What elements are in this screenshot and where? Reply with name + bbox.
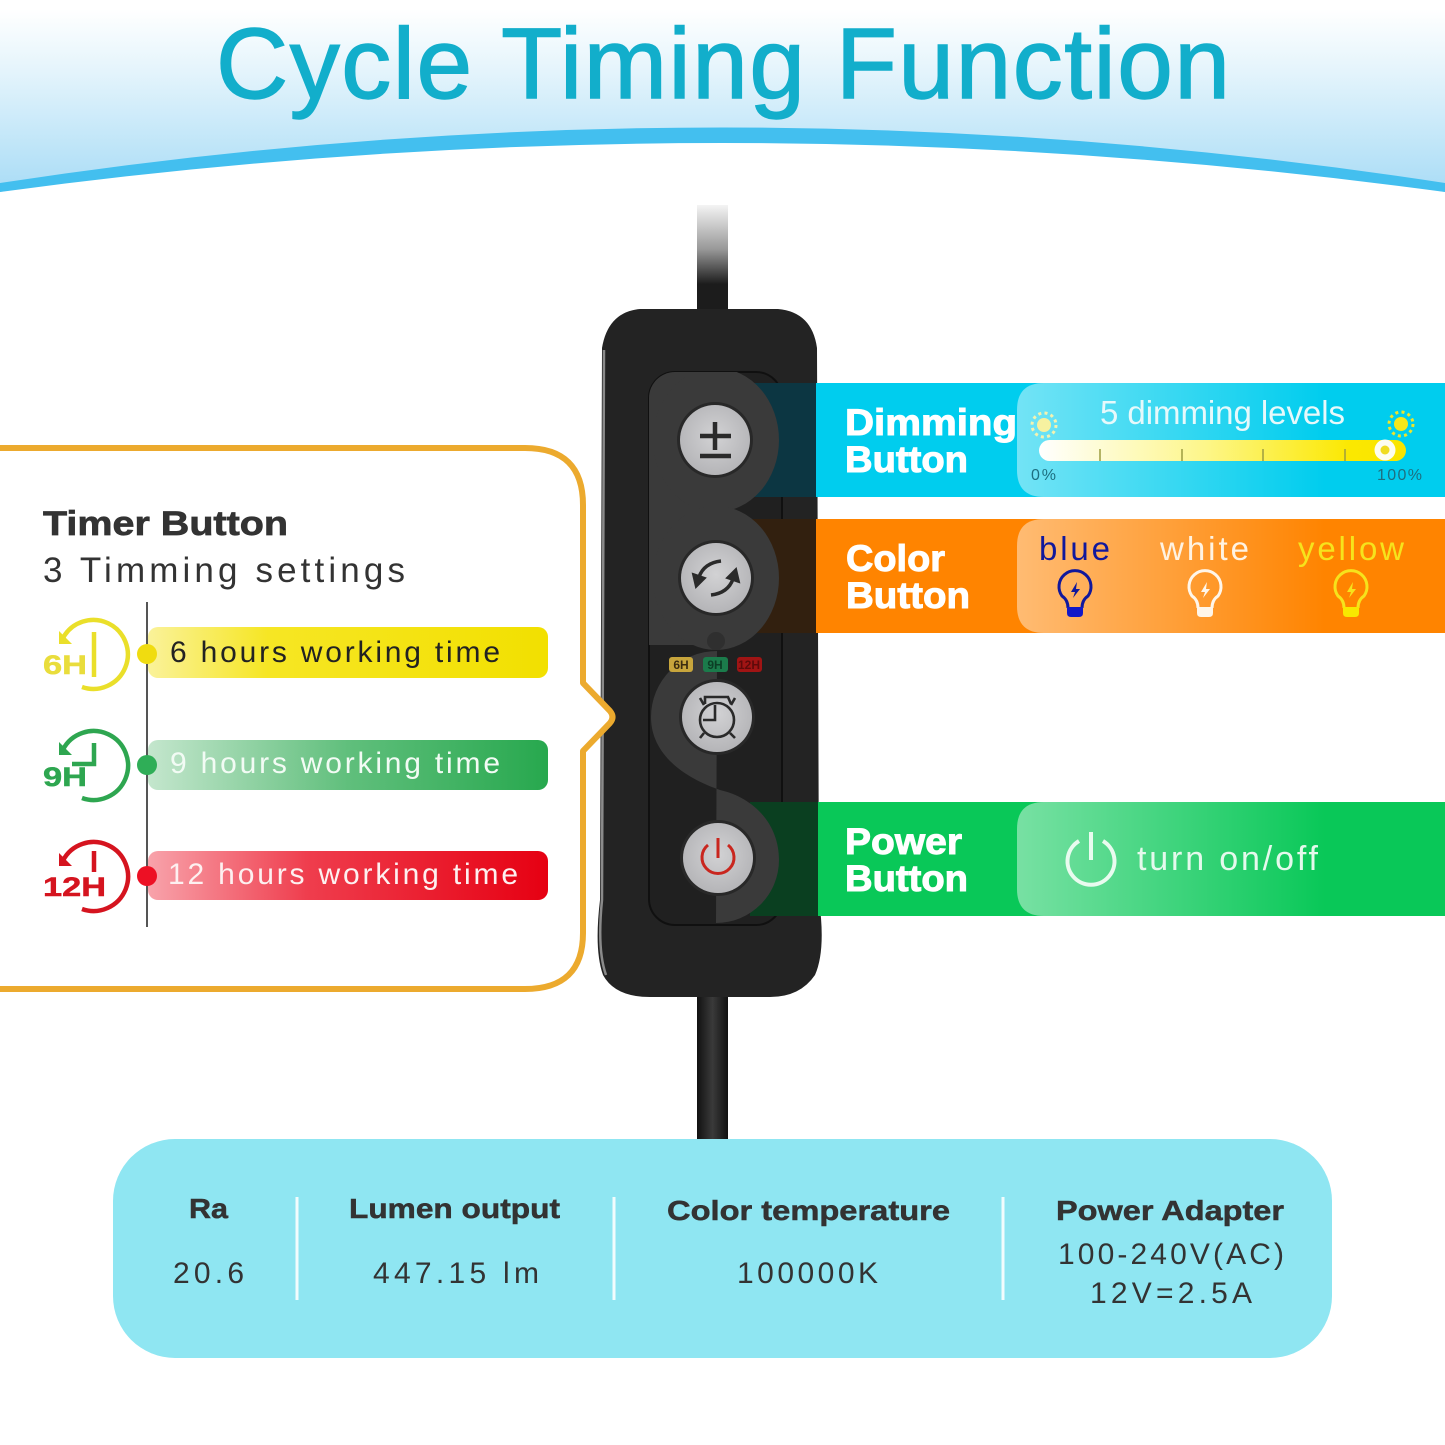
- dimming button: [677, 402, 753, 478]
- spec: Ra: [173, 1193, 244, 1290]
- slider scale labels: 0%: [1031, 467, 1056, 484]
- slider scale labels: [1031, 467, 1422, 484]
- remote control body: [598, 309, 822, 997]
- row: 9 hours: [43, 731, 548, 800]
- row: 6 hours: [43, 620, 548, 689]
- timer subheading: 3 Timming settings: [43, 551, 405, 590]
- dimming caption: 5 dimming levels: [1100, 394, 1345, 431]
- timer callout panel: [0, 448, 612, 989]
- header background: [0, 0, 1445, 192]
- spec: color temperature: 100000K: [737, 1257, 878, 1290]
- power label: Button: [845, 858, 968, 899]
- dividers: [297, 1197, 1003, 1300]
- power button: [680, 820, 756, 896]
- spec: lumen output: Lumen output: [349, 1193, 560, 1224]
- dimming glass panel: [1017, 383, 1445, 497]
- row: 9 hours: 9H: [43, 762, 87, 792]
- power label: Power: [845, 821, 962, 862]
- bright sun icon: [1389, 412, 1413, 436]
- dimming band: [816, 383, 1445, 497]
- dimming label: [845, 402, 1017, 480]
- spec: lumen output: [349, 1193, 560, 1290]
- color band: [816, 519, 1445, 633]
- row: 12 hours: 12 hours working time: [168, 858, 518, 891]
- white option: white: [1159, 530, 1249, 567]
- spec: power adapter: 12V=2.5A: [1090, 1277, 1252, 1310]
- LED labels: 6H: [673, 658, 689, 672]
- row: 6 hours: 6 hours working time: [170, 636, 500, 669]
- timeline line: [146, 602, 148, 927]
- color button: [678, 540, 754, 616]
- LED labels: 12H: [738, 658, 760, 672]
- power glass panel: [1017, 802, 1445, 916]
- LED labels: [669, 657, 762, 672]
- color label: [846, 538, 970, 616]
- power label: [845, 821, 968, 899]
- inner panel: [649, 372, 782, 925]
- spec: power adapter: 100-240V(AC): [1058, 1238, 1284, 1271]
- timer heading: Timer Button: [43, 505, 288, 543]
- row: 12 hours: [43, 842, 548, 911]
- power band: [818, 802, 1445, 916]
- spec: Ra: 20.6: [173, 1257, 244, 1290]
- row: 6 hours: 6H: [43, 650, 87, 680]
- spec: Ra: Ra: [189, 1193, 228, 1224]
- spec: lumen output: 447.15 lm: [373, 1257, 539, 1290]
- row: 12 hours: 12H: [43, 872, 106, 902]
- slider scale labels: 100%: [1377, 467, 1422, 484]
- color glass panel: [1017, 519, 1445, 633]
- timer button: [679, 679, 755, 755]
- blue option: blue: [1039, 530, 1110, 567]
- power caption: turn on/off: [1137, 840, 1319, 878]
- dimming label: Button: [845, 439, 968, 480]
- icon: power symbol: [1067, 832, 1114, 885]
- title: Cycle Timing Function: [216, 8, 1230, 120]
- color label: Color: [846, 538, 945, 579]
- specifications panel: [113, 1139, 1332, 1358]
- yellow option: [1298, 530, 1404, 617]
- dimming label: Dimming: [845, 402, 1017, 443]
- LED labels: 9H: [707, 658, 723, 672]
- pale sun icon: [1032, 413, 1056, 437]
- spec: color temperature: [667, 1195, 950, 1290]
- header curved band: [0, 128, 1445, 300]
- color label: Button: [846, 575, 970, 616]
- cable: [697, 205, 728, 1139]
- spec: power adapter: Power Adapter: [1056, 1195, 1284, 1226]
- callout outline: [0, 448, 612, 989]
- yellow option: yellow: [1298, 530, 1404, 567]
- dark overlays of bands on remote: [750, 383, 818, 916]
- spec: power adapter: [1056, 1195, 1284, 1310]
- spec: color temperature: Color temperature: [667, 1195, 950, 1226]
- blue option: [1039, 530, 1110, 617]
- white option: [1159, 530, 1249, 617]
- status LED: [707, 632, 725, 650]
- row: 9 hours: 9 hours working time: [170, 747, 500, 780]
- button halo shapes: [649, 368, 779, 923]
- dimming slider: [1039, 440, 1406, 461]
